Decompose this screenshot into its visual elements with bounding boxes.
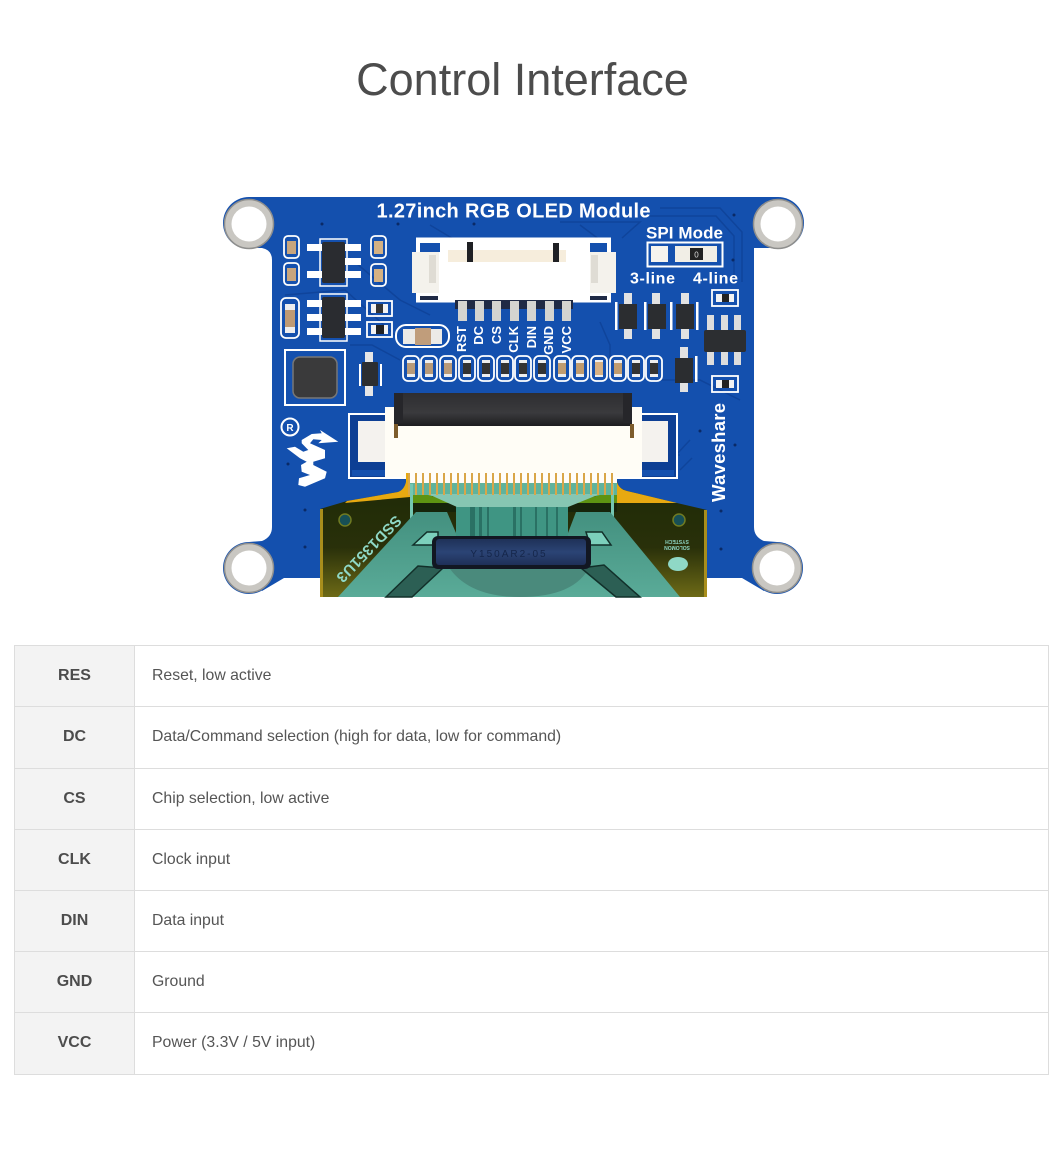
copper traces [285,208,742,470]
3-line label: 3-line [630,270,675,288]
Waveshare logo [287,430,338,487]
row: CS [15,769,1048,830]
inductor [285,350,345,405]
ribbon alignment dots [339,514,685,526]
diode right [675,347,698,392]
ribbon teal traces band [410,473,617,538]
row: VCC: VCC [58,1034,91,1050]
pin labels: GND [541,326,556,355]
SPI mode jumper: 0 [694,250,699,260]
row: CS: CS [63,790,86,807]
flexible OLED ribbon [320,473,707,597]
row: RES: RES [58,667,91,684]
row: RES [15,646,1048,707]
row: DIN [15,891,1048,952]
SPI mode label: SPI Mode [646,224,723,242]
three line diodes [615,293,698,339]
driver IC chip [432,536,591,569]
voltage regulator chip 1 [307,239,361,286]
pin table [14,645,1049,1075]
row: GND [15,952,1048,1013]
FFC socket white body [385,407,642,477]
row: DC: DC [63,728,86,744]
module photo: OLED board [223,197,804,598]
gold contact fingers [408,473,613,495]
SSD1351U3 print: SSD1351U3 [333,512,405,585]
row: CLK: Clock input [152,851,230,868]
Solomon Systech print: SYSTECH [665,538,689,544]
white cable connector [412,238,616,321]
FFC socket black latch [394,393,634,438]
registered mark: R [286,423,294,434]
registered mark [282,418,298,436]
row: DC [15,707,1048,769]
ribbon teal pads [386,532,640,597]
pin labels: DIN [524,326,539,348]
large capacitor [396,325,449,347]
six pin chip [704,315,746,365]
row: VCC [15,1013,1048,1075]
row: GND: GND [57,973,92,990]
diode [359,352,382,396]
voltage regulator chip 2 [307,294,361,341]
row: DIN: Data input [152,912,224,929]
FFC socket outline [349,414,677,478]
4-line label: 4-line [693,270,738,288]
board outline [223,197,804,594]
small capacitors left [281,236,386,338]
Solomon Systech print [664,538,690,571]
driver IC chip: Y150AR2-05 [470,549,548,560]
pin labels: RST [454,326,469,352]
row: CLK: CLK [58,851,91,868]
row: VCC: Power (3.3V / 5V input) [152,1034,315,1050]
Waveshare brand text: Waveshare [708,403,729,502]
ribbon teal lower panel [338,512,680,597]
row: DC: Data/Command selection (high for data, low for command) [152,728,561,744]
pin labels: DC [471,325,486,345]
mounting holes [224,200,802,592]
row: CLK [15,830,1048,891]
ribbon gold edges [320,473,707,597]
pin labels: CS [489,326,504,344]
row: CS: Chip selection, low active [152,790,329,807]
pin labels: VCC [559,325,574,353]
board heading: 1.27inch RGB OLED Module [376,200,650,222]
row: RES: Reset, low active [152,667,271,684]
row: GND: Ground [152,973,205,990]
pin labels [454,325,574,355]
small resistors [367,290,738,392]
Solomon Systech print: SOLOMON [664,544,690,550]
row: DIN: DIN [61,912,88,929]
title: Control Interface [356,54,689,105]
shadow arc under driver chip [448,566,590,597]
resistor and capacitor row [403,356,662,381]
SPI mode jumper [648,242,722,266]
pin labels: CLK [506,325,521,353]
small via dots [286,214,736,550]
